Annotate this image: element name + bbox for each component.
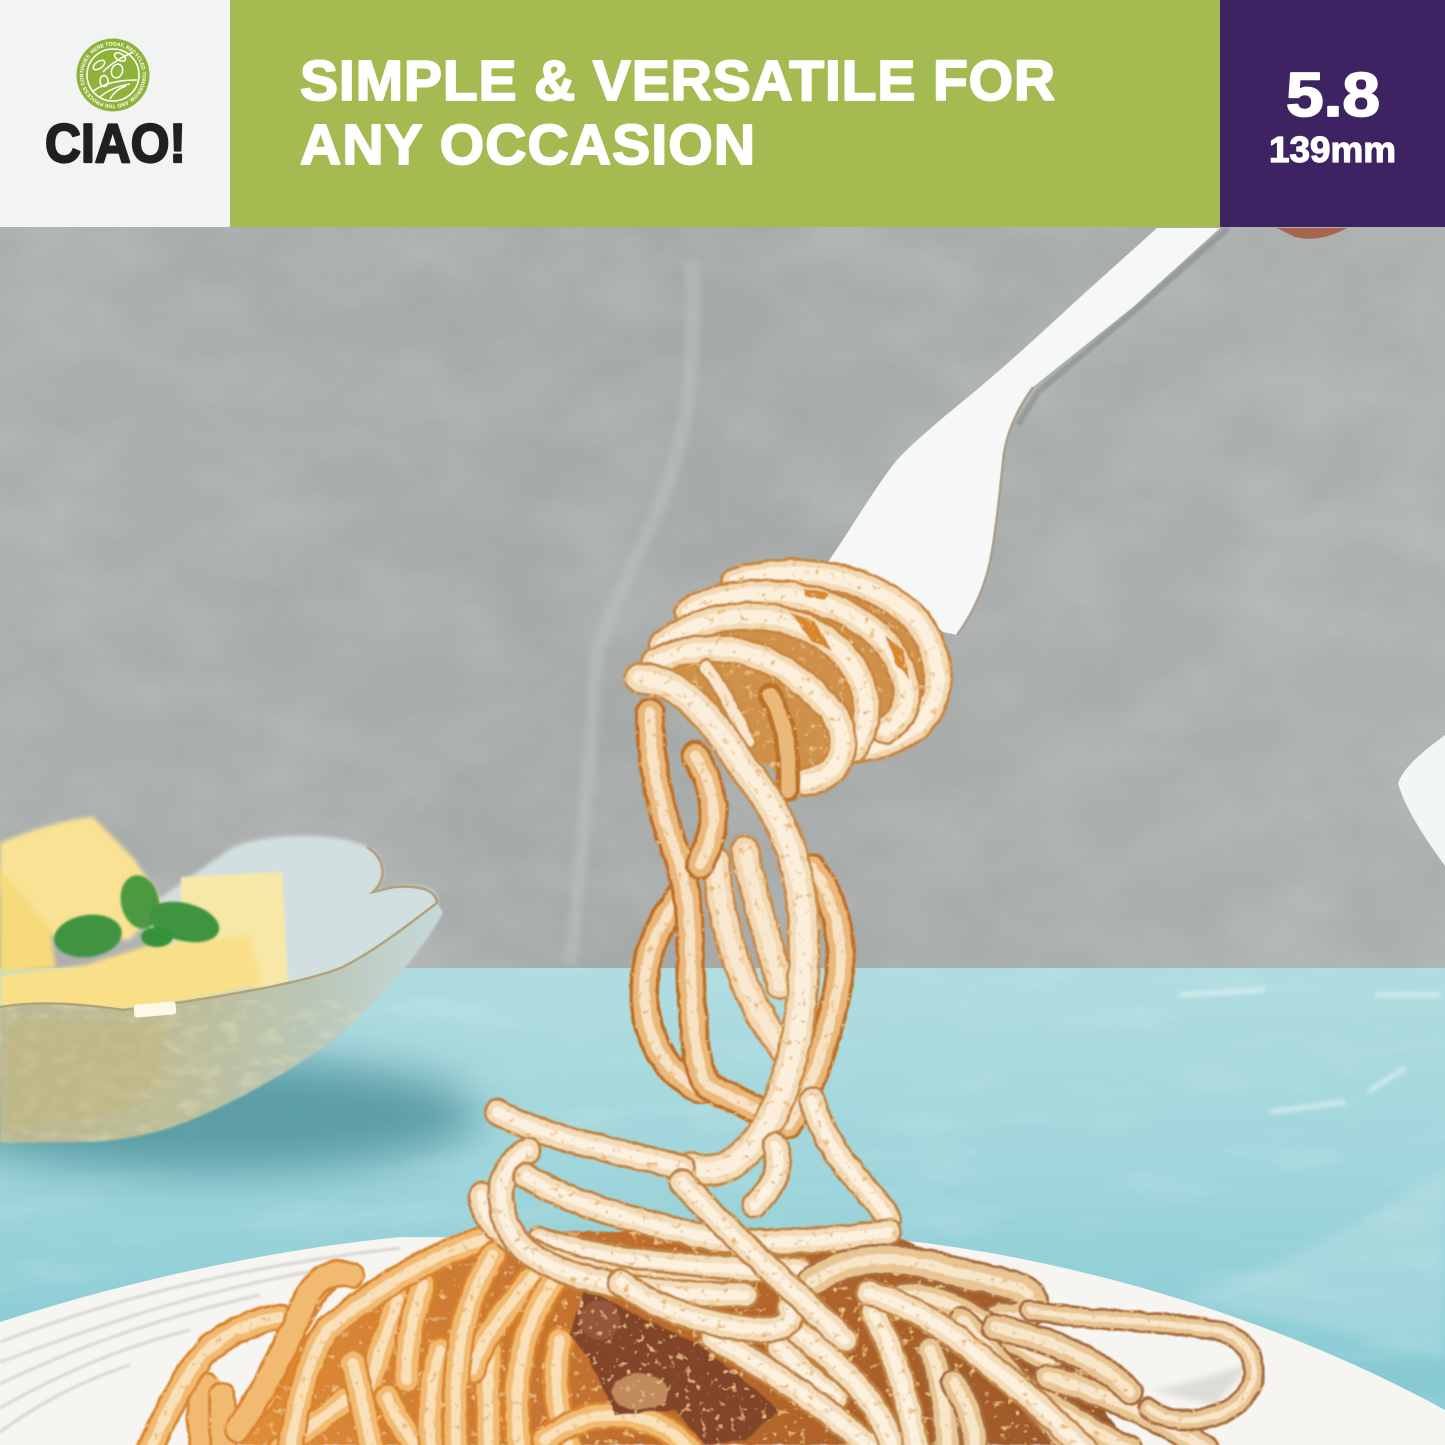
photo background: turquoise table (0, 968, 1445, 1445)
size in millimetres: 139mm (1269, 129, 1396, 170)
logo badge: HERE TODAY, RECYCLED TOMORROW. AND THE PROCESS CONTINUES (80, 42, 146, 108)
title line 2: ANY OCCASION (300, 113, 755, 177)
photo background: grey stone wall (0, 227, 1445, 972)
pineapple chunk right (180, 872, 288, 990)
title line 1: SIMPLE & VERSATILE FOR (300, 49, 1055, 113)
pineapple slice front (0, 935, 262, 1010)
mound: right strands (811, 1259, 1207, 1445)
header: title panel (230, 0, 1220, 227)
mint leaves (51, 872, 224, 962)
pineapple chunk far left (0, 870, 56, 972)
hanging sauced strands (644, 712, 841, 1125)
size in inches: 5.8 (1286, 61, 1380, 130)
mound: front strands (620, 1182, 1085, 1445)
meat ragu (570, 1285, 780, 1445)
fork (828, 228, 1228, 635)
mound: left fan strands (150, 1230, 1130, 1445)
plate (0, 1237, 1445, 1445)
header: size panel (1220, 0, 1445, 227)
brand name: CIAO! (45, 112, 186, 174)
gold rim (0, 847, 437, 1010)
front strand (640, 678, 804, 1170)
spaghetti twirled on the fork and falling to the plate (150, 573, 1254, 1445)
finger holding the fork (1277, 228, 1347, 239)
glass bowl body (0, 903, 445, 1145)
twirled coil (655, 573, 938, 790)
bowl shadow on the table (0, 1057, 480, 1173)
hanging back strands (716, 850, 782, 1048)
header: logo panel (0, 0, 230, 227)
pineapple chunk left (0, 817, 163, 940)
bowl back rim (150, 836, 437, 990)
white dish corner at the right edge (1398, 735, 1445, 866)
mound: swirl strands (482, 1100, 888, 1295)
fruit bowl with pineapple and mint (0, 817, 445, 1145)
right-hand loop of spaghetti (1030, 1310, 1254, 1420)
